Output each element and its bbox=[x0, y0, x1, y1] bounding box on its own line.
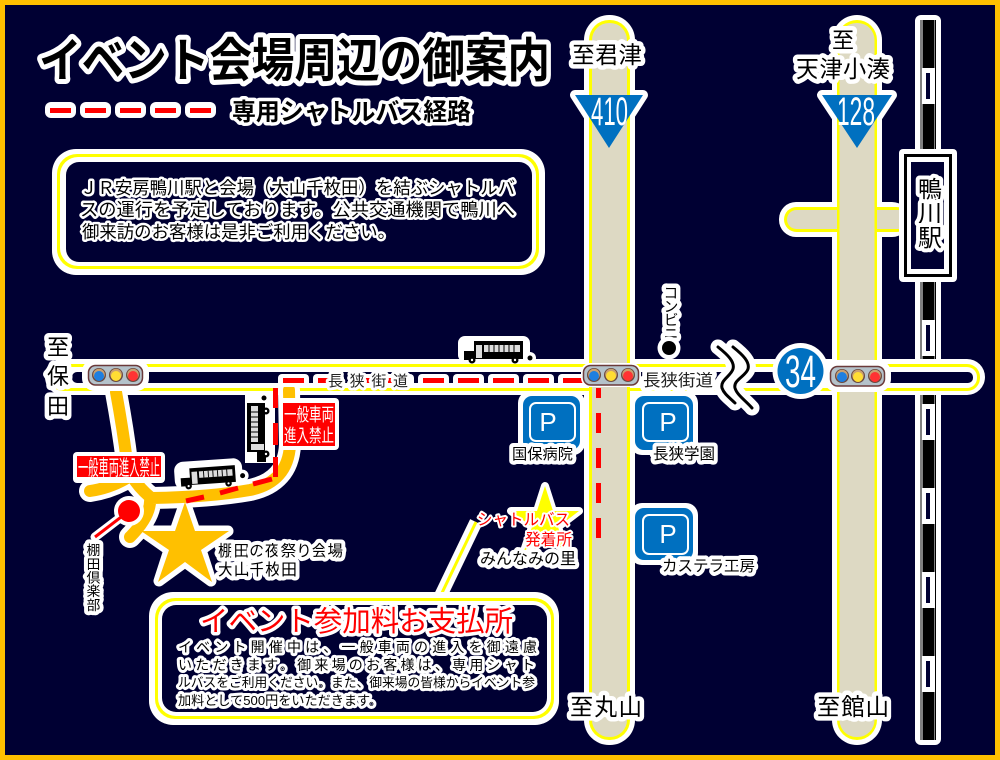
panel: shuttle information bbox=[52, 149, 545, 275]
orange access roads to venue bbox=[90, 390, 290, 537]
label: to Maruyama: 至丸山 bbox=[570, 694, 642, 720]
railway line bbox=[915, 15, 941, 745]
panel: event fee: ルバスをご利用ください。また、御来場の皆様からイベント参 bbox=[178, 675, 535, 690]
convenience store marker: コンビニ bbox=[662, 285, 678, 339]
station: 川 bbox=[918, 201, 942, 228]
icon: parking Kokuho hospital bbox=[518, 391, 585, 455]
callout line from payment panel to shuttle stop bbox=[440, 522, 476, 597]
no entry sign left: 一般車両進入禁止 bbox=[78, 457, 160, 480]
traffic light left bbox=[88, 365, 143, 385]
label: to Hota: 至 bbox=[47, 335, 69, 360]
icon: yellow star shuttle stop bbox=[511, 486, 579, 551]
label: castella workshop: カステラ工房 bbox=[662, 558, 755, 575]
route shield 34: 34 bbox=[785, 346, 816, 397]
no entry sign right: 一般車両 bbox=[284, 405, 334, 425]
route shield 34 bbox=[772, 343, 828, 399]
panel: event fee: イベント参加料お支払所 bbox=[200, 606, 513, 638]
icon: parking castella workshop bbox=[630, 503, 698, 565]
road name left: 長狭街道 bbox=[328, 373, 408, 390]
label: to Tateyama: 至館山 bbox=[817, 694, 889, 720]
no entry sign right bbox=[279, 398, 339, 450]
panel: shuttle information: スの運行を予定しております。公共交通機関で鴨川へ bbox=[80, 200, 515, 220]
route shield 128: 128 bbox=[837, 90, 875, 134]
icon: large star venue marker bbox=[141, 502, 229, 582]
convenience store marker bbox=[658, 285, 680, 360]
label: to Hota: 保 bbox=[47, 364, 69, 389]
label: to Amatsu-Kominato: 至 bbox=[832, 28, 854, 53]
label: Nagasa school: 長狭学園 bbox=[653, 445, 715, 463]
label: venue name: 棚田の夜祭り会場 bbox=[218, 542, 343, 560]
icon: parking Nagasa school bbox=[630, 391, 698, 455]
panel: event fee: いただきます。御来場のお客様は、専用シャト bbox=[178, 657, 535, 673]
title: イベント会場周辺の御案内 bbox=[39, 34, 550, 87]
icon: parking castella workshop: P bbox=[659, 519, 677, 549]
label: to Amatsu-Kominato bbox=[796, 28, 890, 82]
white halo of access roads and venue star bbox=[90, 390, 290, 581]
panel: shuttle information: ＪＲ安房鴨川駅と会場（大山千枚田）を結ぶシャトルバ bbox=[80, 178, 515, 198]
label: to Hota: 田 bbox=[47, 394, 69, 419]
panel: shuttle information: 御来訪のお客様は是非ご利用ください。 bbox=[82, 222, 395, 242]
station: 鴨 bbox=[918, 177, 942, 204]
legend: shuttle bus route bbox=[45, 99, 471, 126]
traffic light center bbox=[583, 365, 639, 385]
icon: parking Kokuho hospital: P bbox=[539, 407, 557, 437]
panel: event fee: 加料として500円をいただきます。 bbox=[178, 693, 382, 708]
route shield 410: 410 bbox=[591, 90, 628, 134]
shuttle bus route dashes bbox=[186, 374, 601, 538]
no entry sign left bbox=[73, 452, 165, 483]
road break wave symbol bbox=[718, 347, 752, 408]
panel: event fee bbox=[149, 592, 559, 725]
label: shuttle bus stop: みんなみの里 bbox=[480, 550, 576, 568]
station: 駅 bbox=[918, 225, 942, 252]
icon: vertical bus near entrance bbox=[245, 395, 275, 463]
no entry sign right: 進入禁止 bbox=[284, 426, 334, 446]
route shield 128 bbox=[822, 90, 892, 148]
station bbox=[899, 149, 957, 282]
label: shuttle bus stop: 発着所 bbox=[525, 531, 572, 549]
road name right: 長狭街道 bbox=[643, 371, 713, 390]
label: to Kimitsu: 至君津 bbox=[572, 42, 642, 68]
icon: parking Nagasa school: P bbox=[659, 407, 677, 437]
icon: bus on access road bbox=[174, 457, 249, 490]
label: Tanada club: 棚田倶楽部 bbox=[84, 543, 100, 612]
label: venue name: 大山千枚田 bbox=[218, 561, 297, 579]
panel: event fee: イベント開催中は、一般車両の進入を御遠慮 bbox=[178, 639, 537, 655]
icon: bus on highway bbox=[458, 336, 536, 364]
traffic light right bbox=[830, 366, 885, 386]
label: venue name bbox=[218, 542, 343, 579]
label: to Hota bbox=[47, 335, 69, 419]
label: to Amatsu-Kominato: 天津小湊 bbox=[796, 56, 890, 82]
legend: shuttle bus route: 専用シャトルバス経路 bbox=[232, 99, 471, 126]
label: shuttle bus stop: シャトルバス bbox=[477, 512, 570, 529]
red pin: Tanada club bbox=[95, 496, 144, 537]
label: Kokuho hospital: 国保病院 bbox=[512, 446, 573, 463]
label: shuttle bus stop bbox=[477, 512, 576, 568]
route shield 410 bbox=[575, 90, 643, 148]
